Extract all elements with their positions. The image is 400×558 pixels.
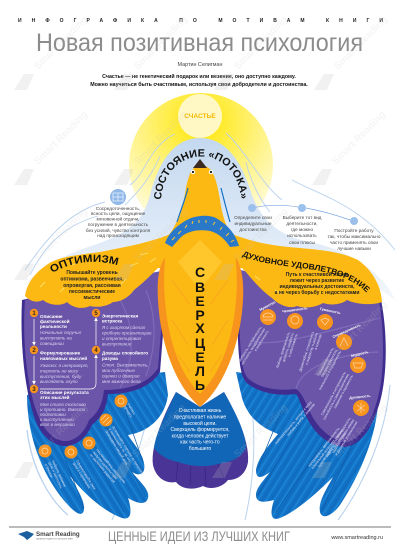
optimism step 4: Стоп. Выпрямитесь, [102,362,149,368]
right wing blue feathers [236,372,378,519]
virtue: fairness [311,323,362,391]
flow step 3 text [328,227,381,251]
virtue: justice: в команде [314,333,323,350]
virtue: wisdom [319,350,369,423]
flow step 3 text: часто применять свои [330,240,378,245]
virtue: wisdom: Самоконтроль и осторожность, [320,371,347,416]
bird head and neck [168,159,232,238]
footer logo: ценные идеи из лучших книг [36,536,73,540]
flow text left: над происходящим [97,233,139,238]
tail: предполагает наличие [174,414,226,420]
watermarks: Smart Reading [32,14,90,72]
optimism step 3 [30,385,89,427]
flow step 3 text: Постройте работу [334,227,374,233]
title: Новая позитивная психология [36,29,363,57]
virtue: fairness: Справедливость [332,323,362,339]
optimism text: опровергая, рассеивая [63,283,121,289]
virtue: courage [237,300,277,368]
watermarks: Smart Reading [232,14,290,72]
footer logo [18,531,80,540]
watermarks: Smart Reading [130,402,188,460]
optimism text: пессимистические [69,289,115,295]
optimism step 4: оценки и доверие [102,374,140,378]
optimism step 4 [92,346,149,384]
left wing blue feathers [27,372,168,518]
optimism step 3: подготовки [40,412,66,417]
virtue: wisdom: Мудрость [351,350,369,358]
lead text [90,73,308,88]
blue feather text right [274,400,347,472]
tail [153,392,248,489]
optimism step 4: мои публичные [102,368,135,373]
tail: Сверхцель формируется, [170,427,230,433]
virtue: fairness: беспристрастность, [320,348,338,378]
optimism text: оптимизма, развенчивая, [60,276,124,282]
watermarks: Smart Reading [132,206,190,264]
virtue: spirituality: и духовные устремления [334,421,359,456]
optimism step 2: 2 [32,348,36,354]
watermarks: Smart Reading [332,14,390,72]
optimism step 3: и противно. Вместо [40,407,86,412]
tail: когда человек действует [172,432,229,440]
footer slogan: ЦЕННЫЕ ИДЕИ ИЗ ЛУЧШИХ КНИГ [108,529,291,544]
blue feather note 1 [114,394,137,418]
optimism text [60,269,124,301]
optimism text: Повышайте уровень [66,269,118,276]
flow steps connector [248,204,358,225]
blue feather note 5: Найдите любимое [51,460,67,488]
optimism step 1 [30,309,82,346]
blue feather text right: находчивость, оригинальность, [307,426,341,468]
virtue: spirituality: Духовность [349,394,371,400]
tail: как часть чего-то [180,440,220,446]
heading: superpurpose [195,264,206,393]
optimism step 2: Формулирование [40,350,81,356]
flow step 3 text: лучшие навыки [337,246,371,251]
heading: superpurpose: Ц [195,335,206,351]
flow text left: ясность цели, ощущение [91,211,146,216]
watermarks: Smart Reading [132,14,190,72]
wings yellow shoulders [25,234,382,308]
heading: superpurpose: Р [195,307,205,323]
footer logo: Smart Reading [36,531,80,538]
blue feather note 5 [38,444,67,491]
watermarks: Smart Reading [132,109,190,167]
optimism step 3: к выступлению [40,417,74,422]
watermarks: Smart Reading [32,109,90,167]
heading: superpurpose: В [195,279,205,295]
virtue: courage: Мужество [259,300,277,312]
flow step 1 text: Определите свои [234,215,272,220]
blue feather text right: любознательность, интерес к миру, [274,400,313,445]
optimism text: мысли [84,295,100,301]
blue feather note 4: Сформулируйте свои [75,459,97,490]
spiritual text [275,271,359,296]
flow step 1 text: индивидуальные [234,221,272,226]
optimism step 5: встряска [102,318,123,324]
tail: Счастливая жизнь [179,408,222,414]
bird body [158,240,243,407]
optimism step 1: фактической [40,318,70,324]
optimism step 1: 1 [32,311,36,317]
watermarks: Smart Reading [332,299,390,357]
blue feather text right: социальный интеллект, умение [310,429,344,470]
optimism step 2: навязчивых мыслей [40,355,87,361]
optimism arrows [32,318,98,389]
heading: flow state: СОСТОЯНИЕ «ПОТОКА» [154,149,247,199]
heading: superpurpose: Ь [195,377,205,393]
virtue: humanity: Человечность [282,306,308,314]
blue feather text right: любовь к учёбе и знаниям [286,402,316,437]
lead text: Счастье — не генетический подарок или везение, оно доступно каждому. [102,73,296,80]
optimism step 2: выступления, буду [40,374,82,379]
optimism step 2 [30,346,89,384]
optimism step 5: выступление [102,342,132,346]
optimism step 3: 3 [32,387,36,393]
flow step 2 text: использовать [287,233,317,238]
optimism step 1: совещании [40,341,64,346]
virtue: justice [298,307,342,375]
watermarks: Smart Reading [32,402,90,460]
virtue: fairness: Гражданственность, [316,347,335,377]
blue feather note 3 [82,436,127,490]
flow step 1 text [234,215,272,232]
optimism step 4: разума [102,356,118,361]
optimism step 4: мне важного дела [102,379,141,384]
flow text left: Сосредоточенность, [96,206,140,211]
virtue: humanity: Любовь, привязанность, [275,331,291,369]
sun [129,93,273,237]
flow step 2 text: Выберите тот вид [283,215,322,220]
blue feather note 1: прощать [123,405,133,418]
heading: optimism: ОПТИМИЗМ [50,254,118,272]
spiritual text: а не через борьбу с недостатками [275,289,359,296]
virtue: humanity: доброта, щедрость [282,332,295,362]
flow icon [110,189,126,205]
wing yellow dashes [40,253,351,294]
virtue: courage: и энергичность [254,329,270,352]
optimism step 3: этих мыслей [40,394,70,400]
blue feather note 3: получая удовольствие [92,451,118,480]
blue feather note 2: и записывайте то, за что [108,428,132,463]
flow text left: мгновенной отдачи, [97,216,139,222]
watermarks: Smart Reading [332,402,390,460]
virtue: spirituality: надежда, чувство юмора [331,418,355,454]
blue feather note 3: Наслаждайтесь настоящим, [95,448,127,485]
bird collar [165,216,239,247]
footer url: www.smartreading.ru [330,535,383,541]
heading: superpurpose: Е [195,349,205,365]
virtue: spirituality [317,394,371,473]
watermarks [14,14,390,478]
watermarks: Smart Reading [232,402,290,460]
optimism step 4: 4 [94,348,98,354]
left wing purple [21,270,168,446]
optimism step 5: Энергетическая [102,314,138,318]
virtue: wisdom: способность к самоограничению, [322,372,350,421]
optimism step 2: Ужасно: я интроверт, [40,363,89,368]
virtue: justice: Дружелюбие, способность [298,331,315,372]
optimism step 1: выступать на [40,336,72,340]
flow text left [86,206,151,238]
heading: superpurpose: Л [195,363,205,379]
top label: ИНФОГРАФИКА ПО МОТИВАМ КНИГИ [18,18,383,24]
blue feather note 2: благодарны каждый день [104,430,129,466]
flow step 2 text: свои плюсы [289,240,316,245]
tail: большего [189,446,211,452]
heading: spiritual satisfaction: ДУХОВНОЕ УДОВЛЕТВОРЕНИЕ [242,252,370,292]
blue feather note 2: Вспоминайте хорошее из прошлого [111,425,144,475]
optimism step 2: терпеть не могу [40,368,79,374]
heading: superpurpose: С [195,264,205,280]
flow step 2 text: деятельности, [286,221,318,226]
tail: высокой цели. [183,420,217,427]
virtue: humanity: и заботливость [287,333,299,358]
virtue: humanity [275,306,308,371]
optimism step 1: Описание [40,314,63,319]
optimism step 5: 5 [94,311,98,317]
flow step 2 text: где можно [291,227,314,232]
watermarks: Smart Reading [232,206,290,264]
mist around the head [25,138,395,300]
optimism step 5: Я с азартом сделал [101,325,146,330]
optimism step 5: и отрепетировал [102,336,142,341]
heading: superpurpose: Е [195,293,205,309]
blue feather note 4: цели и стремления [72,462,91,489]
flow streaks [25,133,395,520]
optimism step 1: Начальник поручил [40,330,82,335]
heading: superpurpose: Х [195,320,205,336]
lead text: Можно научиться быть счастливым, используя свои добродетели и достоинства. [90,81,308,88]
right wing purple [237,270,386,447]
flow step 1 text: достоинства [239,227,267,232]
virtue: courage: храбрость, настойчивость, [237,325,263,363]
author: Мартин Селигман [178,62,222,68]
optimism step 5 [92,309,152,346]
blue feather note 1: Учитесь [126,402,136,415]
virtue: fairness: лояльность и порядочность [318,350,342,391]
flow text left: без усилий, чувство контроля [86,227,151,233]
blue feather text right: видеть перспективу [325,431,347,458]
optimism step 5: пробную презентацию [102,330,152,336]
flow step 2 text [283,215,322,245]
watermarks: Smart Reading [32,206,90,264]
optimism step 3: вязл в мерзании [40,422,75,427]
optimism step 3: Мне стало тоскливо [40,402,86,407]
watermarks: Smart Reading [330,109,388,167]
spiritual text: индивидуальных достоинств, [279,284,355,290]
virtue: justice: к лидерству и работе [305,332,319,365]
spiritual text: Путь к счастливой жизни [286,271,348,278]
optimism step 4: Доводы спокойного [102,350,148,356]
spiritual text: лежит через развитие [290,278,344,284]
blue feather note 5: о близких [44,463,54,479]
blue feather note 3: от маленьких радостей [89,453,116,484]
virtue: wisdom: смирение и скромность [333,374,354,409]
flow step 3 text: так, чтобы максимально [328,234,381,239]
blue feather note 4 [64,446,97,492]
blue feather note 5: дело и заботьтесь [47,461,63,489]
footer rule [9,526,391,528]
virtue: spirituality: Чувство прекрасного, благодарность, [317,416,352,468]
optimism step 2: выглядеть глупо [40,379,78,384]
sun: СЧАСТЬЕ [184,113,216,120]
virtue: courage: честность, воодушевление [240,327,266,366]
virtue: justice: Гуманность [320,307,342,315]
optimism step 3: Описание результата [40,390,89,395]
flow text left: погружение в деятельность [88,222,149,227]
blue feather note 2 [100,414,144,480]
optimism step 1: реальности [40,324,67,329]
